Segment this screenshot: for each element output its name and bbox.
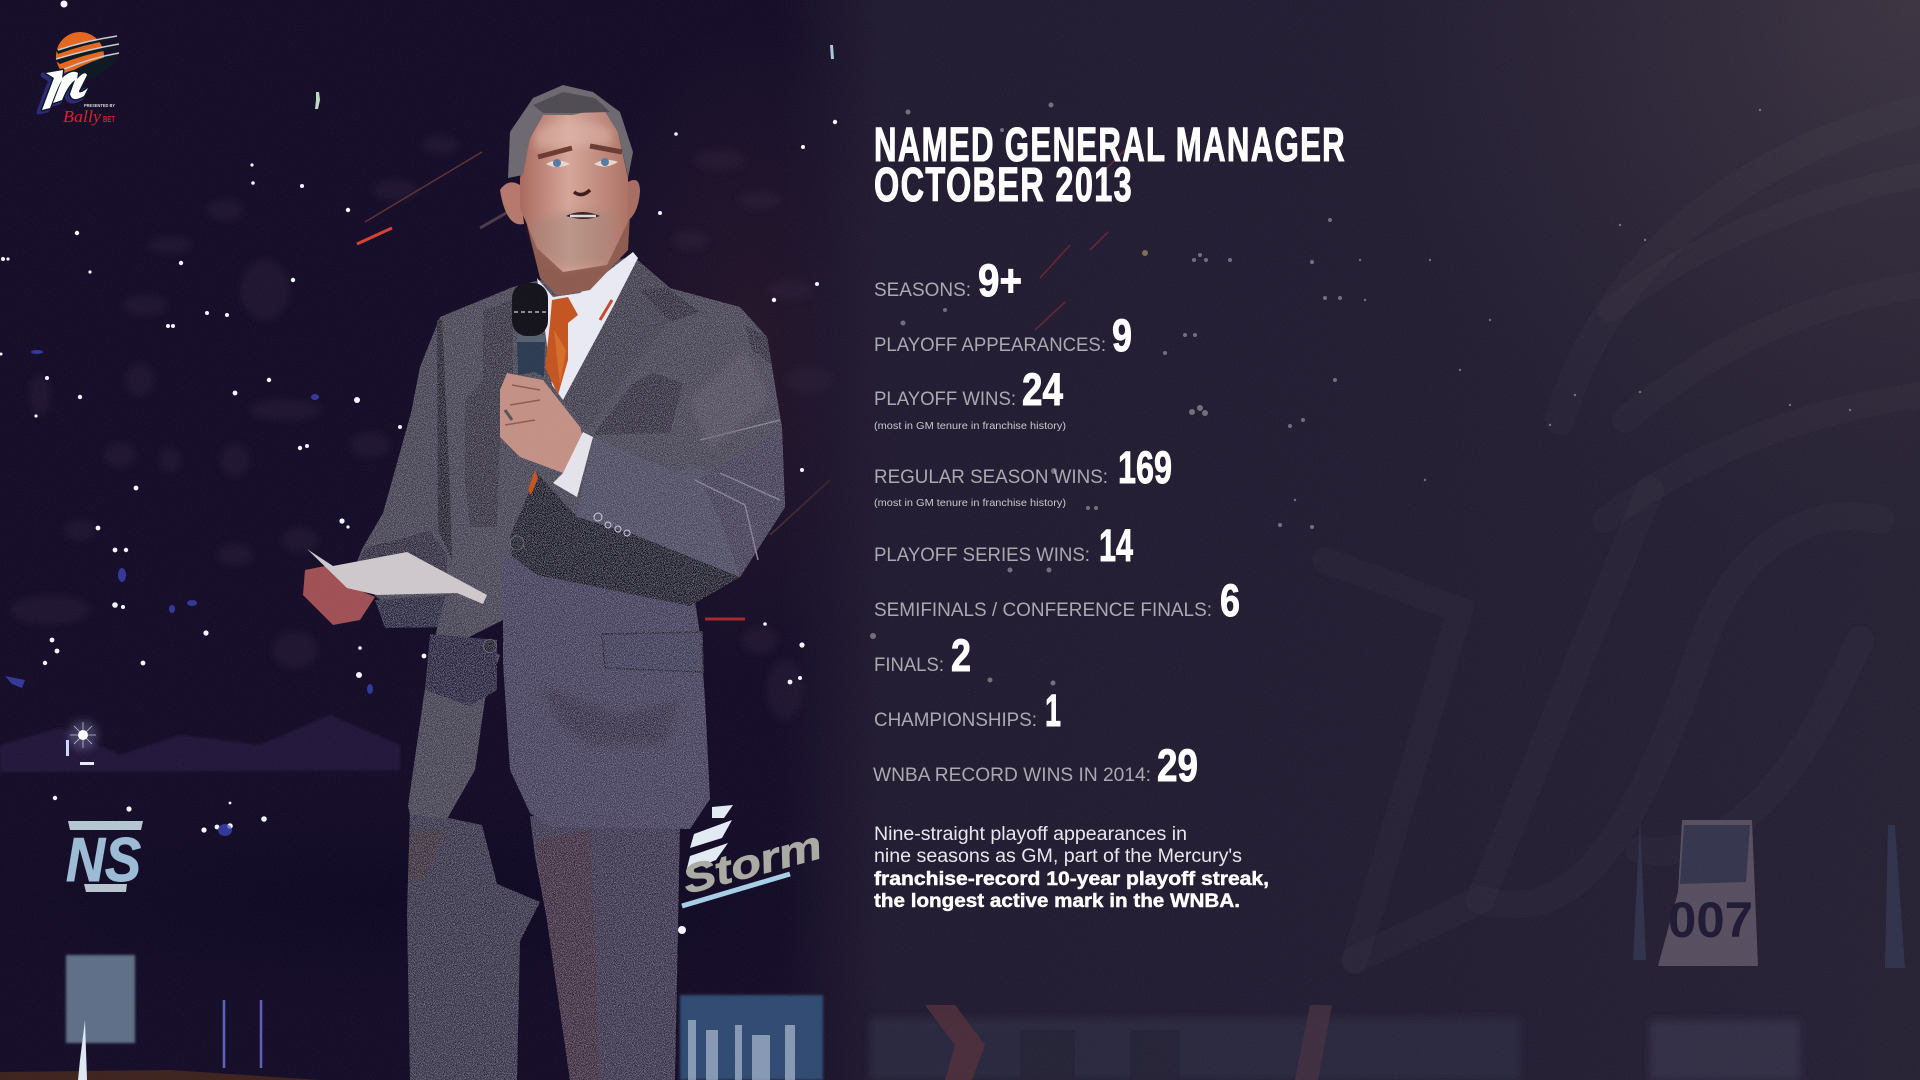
dimmed lights behind text: [870, 102, 1851, 686]
head: [500, 85, 640, 272]
team logo: Phoenix Mercury presented by Bally Bet: BET: [103, 115, 115, 124]
stat: playoff wins: [874, 364, 1066, 432]
stat: semifinals and conference finals: 6: [1220, 575, 1240, 626]
red streaks behind text: [1035, 150, 1125, 330]
stat: playoff appearances: 9: [1112, 310, 1132, 361]
shirt: [537, 252, 638, 400]
right background: bottom banner and jersey: [870, 820, 1905, 1080]
stat: semifinals and conference finals: SEMIFINALS / CONFERENCE FINALS:: [874, 600, 1212, 621]
stat: WNBA record wins in 2014: 29: [1157, 740, 1198, 791]
watermark: large team logo: [1325, 110, 1920, 960]
stat: regular season wins: 169: [1118, 442, 1172, 493]
closing paragraph: [874, 824, 1269, 912]
team logo: Phoenix Mercury presented by Bally Bet: [39, 32, 120, 126]
stat: playoff wins: (most in GM tenure in franchise history): [874, 420, 1066, 432]
tie: [528, 297, 578, 495]
paper in hand: [307, 549, 487, 604]
chest shading: [465, 300, 513, 527]
team logo: Phoenix Mercury presented by Bally Bet: PRESENTED BY: [84, 103, 115, 108]
floor reflection left: [66, 955, 261, 1080]
stat: playoff wins: 24: [1022, 364, 1063, 415]
crowd phone lights: [0, 0, 837, 934]
right lapel: [563, 256, 670, 430]
left hand: [303, 565, 375, 625]
crowd silhouettes: [10, 136, 834, 720]
person: general manager at microphone: [303, 85, 785, 1080]
nose and mouth: [574, 190, 590, 195]
neck: [527, 215, 630, 296]
stat: regular season wins: REGULAR SEASON WINS:: [874, 467, 1108, 488]
icon: orange sun with swooshes: [54, 32, 120, 80]
title: [874, 119, 1346, 212]
stubble: [530, 210, 615, 270]
shirt cuff: [553, 432, 593, 497]
stat: playoff series wins: 14: [1099, 520, 1133, 571]
small blue crowd lights: [5, 350, 373, 836]
jersey: [1633, 820, 1905, 968]
forearm sleeve: [577, 437, 785, 577]
jacket body: [408, 256, 785, 829]
arena sign: Storm: Storm: [678, 823, 826, 903]
stat: finals: [874, 630, 971, 681]
stat: championships: [874, 685, 1061, 736]
team logo: Phoenix Mercury presented by Bally Bet: Bally: [63, 107, 101, 126]
closing paragraph: nine seasons as GM, part of the Mercury's: [874, 846, 1242, 867]
stat: seasons: SEASONS:: [874, 280, 971, 301]
stat: seasons: 9+: [978, 255, 1022, 306]
stat: WNBA record wins in 2014: WNBA RECORD WINS IN 2014:: [873, 765, 1151, 786]
light flare: [66, 720, 98, 765]
brows and eyes: [538, 146, 622, 157]
stat: semifinals and conference finals: [874, 575, 1240, 626]
trousers: [407, 810, 680, 1080]
stat: regular season wins: (most in GM tenure in franchise history): [874, 497, 1066, 509]
closing paragraph: franchise-record 10-year playoff streak,: [874, 869, 1269, 890]
floor reflection right: [680, 995, 823, 1080]
buttons: [510, 536, 524, 550]
stat: championships: 1: [1045, 685, 1061, 736]
text-side haze overlay: [780, 0, 1920, 1080]
jersey: 007: [1668, 892, 1753, 948]
crowd streaks: [357, 152, 830, 619]
pocket flap: [602, 632, 703, 672]
stat: finals: FINALS:: [874, 655, 944, 676]
stat: playoff appearances: PLAYOFF APPEARANCES:: [874, 335, 1106, 356]
stat: playoff series wins: [874, 520, 1133, 571]
title: OCTOBER 2013: [874, 159, 1133, 212]
arena sign: Storm: [678, 805, 826, 906]
arena sign: NS: NS: [66, 826, 141, 895]
title: NAMED GENERAL MANAGER: [874, 119, 1346, 172]
hair: [508, 85, 633, 178]
closing paragraph: the longest active mark in the WNBA.: [874, 891, 1240, 912]
stat: finals: 2: [951, 630, 971, 681]
stat: seasons: [874, 255, 1022, 306]
lower right panel: [503, 556, 710, 829]
closing paragraph: Nine-straight playoff appearances in: [874, 824, 1187, 845]
icon: letter M: [39, 70, 88, 112]
floor edge: [0, 1070, 320, 1080]
left sleeve and arm: [352, 317, 462, 630]
lower left panel: [408, 591, 500, 819]
stat: regular season wins: [874, 442, 1172, 509]
upper jacket: [437, 256, 785, 638]
shadow under forearm: [510, 473, 740, 606]
stat: WNBA record wins in 2014: [873, 740, 1198, 791]
stat: playoff appearances: [874, 310, 1132, 361]
right hand: [500, 373, 583, 473]
microphone: [512, 283, 548, 377]
stat: championships: CHAMPIONSHIPS:: [874, 710, 1037, 731]
stat: playoff wins: PLAYOFF WINS:: [874, 389, 1016, 410]
stat: playoff series wins: PLAYOFF SERIES WINS:: [874, 545, 1090, 566]
